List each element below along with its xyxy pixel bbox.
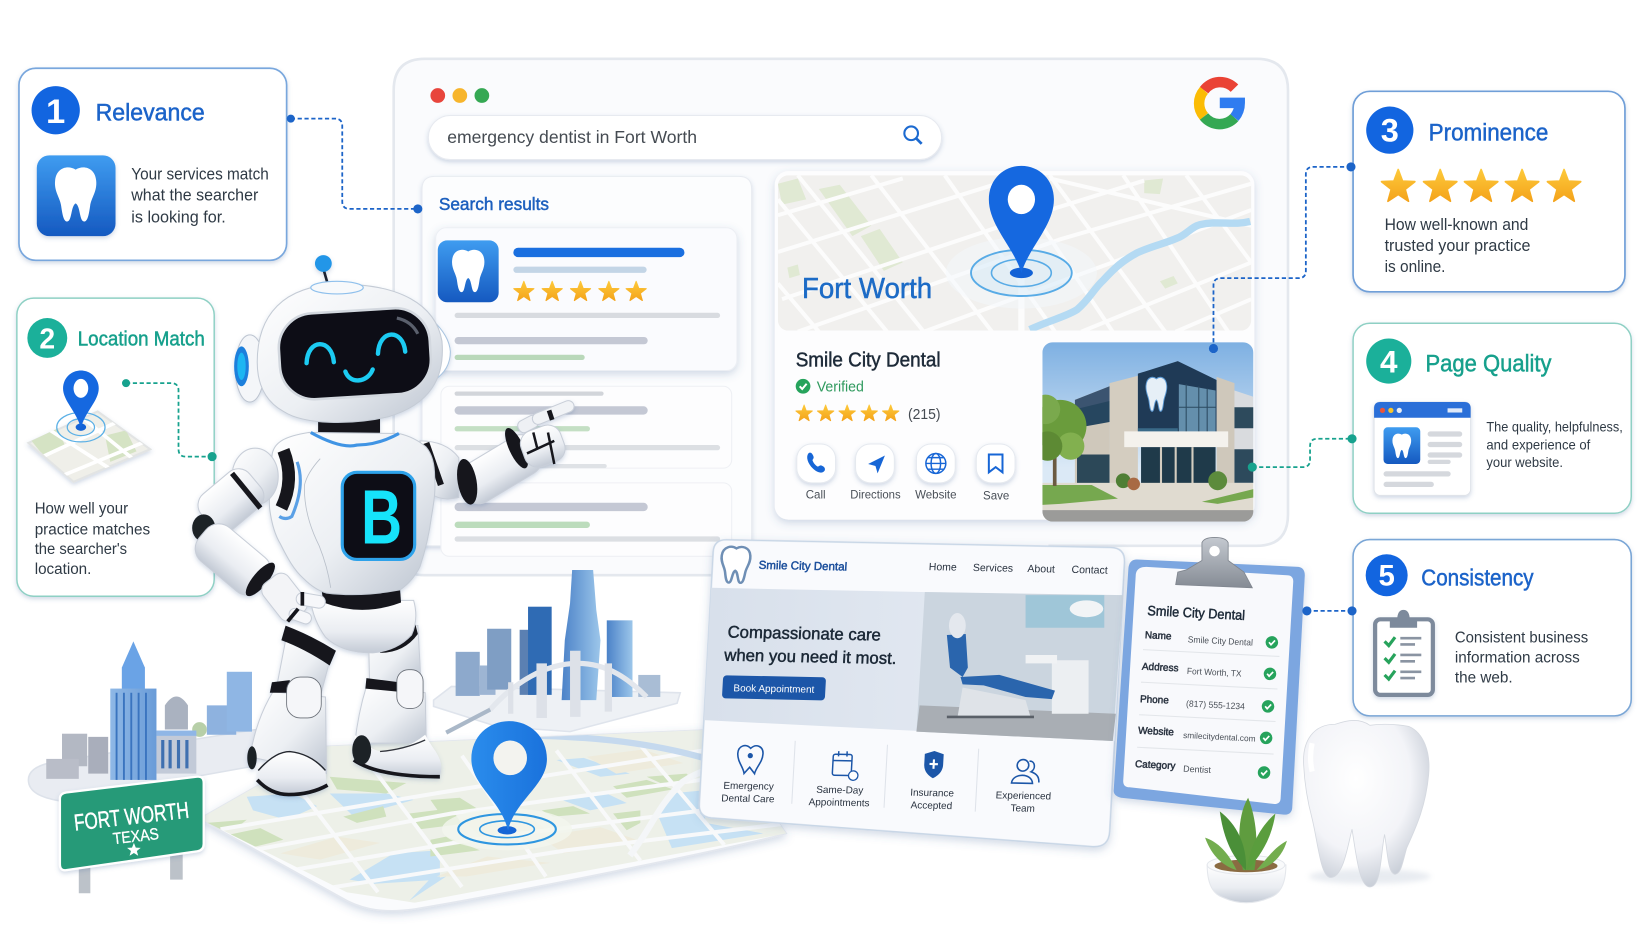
heading: Location Match [78, 328, 205, 350]
feature: emergency care: Dental Care [721, 793, 775, 805]
feature: same-day appointments: Appointments [808, 797, 870, 809]
site logo and name: Smile City Dental [758, 560, 847, 574]
description [35, 500, 150, 578]
number badge [1366, 107, 1413, 154]
star rating with count [796, 405, 941, 423]
row: category: Category [1135, 759, 1176, 772]
heading: Prominence [1429, 120, 1548, 147]
number badge [27, 318, 67, 358]
action: directions [850, 444, 901, 502]
icon: clipboard checklist [1375, 610, 1433, 695]
panel: search results [422, 176, 752, 556]
description: The quality, helpfulness, [1486, 419, 1623, 434]
callout 3: prominence [1353, 91, 1625, 292]
row: category: Dentist [1183, 764, 1212, 775]
number badge: 1 [46, 93, 65, 131]
site navigation: Home [928, 561, 957, 574]
feature: experienced team: Experienced [995, 790, 1051, 803]
feature: same-day appointments: Same-Day [816, 785, 864, 797]
map label: Fort Worth [802, 273, 932, 305]
icon: Google G [1199, 82, 1240, 124]
row: name [1144, 630, 1278, 649]
hero headline [723, 622, 898, 668]
description [130, 165, 269, 227]
clipboard frame [1114, 559, 1305, 815]
action: directions: Directions [850, 490, 901, 502]
row: address: Fort Worth, TX [1187, 666, 1242, 679]
row: phone: (817) 555-1234 [1186, 699, 1245, 711]
description: How well your [35, 500, 128, 517]
icon: tooth tile [438, 240, 499, 302]
row: website: smilecitydental.com [1183, 730, 1256, 744]
description: location. [35, 561, 91, 578]
photo: dental office building [1031, 342, 1253, 522]
number badge: 4 [1380, 345, 1398, 380]
feature: experienced team: Team [1010, 803, 1035, 815]
hero photo: dental chair [916, 592, 1123, 741]
site navigation: Contact [1071, 564, 1108, 577]
clipboard paper [1123, 567, 1293, 804]
feature: same-day appointments [808, 751, 872, 809]
map panel [778, 166, 1251, 332]
row: phone [1140, 694, 1275, 713]
illustration: potted plant [1205, 798, 1287, 903]
site navigation: About [1027, 563, 1055, 576]
robot legs [247, 621, 441, 795]
verified badge [796, 379, 864, 396]
callout 4: page quality [1353, 323, 1631, 513]
heading: search results: Search results [439, 194, 549, 214]
feature: emergency care: Emergency [723, 781, 774, 793]
robot pelvis [311, 600, 416, 653]
description: is online. [1385, 258, 1445, 276]
verified badge: Verified [817, 380, 864, 396]
row: website: Website [1138, 726, 1175, 738]
star rating with count: (215) [908, 407, 941, 423]
connector: consistency [1303, 607, 1356, 615]
description: is looking for. [131, 209, 226, 227]
heading: Consistency [1421, 565, 1534, 591]
star rating [514, 281, 646, 301]
illustration: Fort Worth sign: FORT WORTH [73, 797, 190, 836]
number badge: 5 [1378, 560, 1395, 593]
button: book appointment [722, 675, 826, 700]
row: address [1142, 661, 1277, 680]
icon: web page [1374, 402, 1471, 495]
connector: location match [123, 380, 216, 460]
description [1455, 629, 1588, 686]
action: save [976, 444, 1015, 503]
site navigation [928, 561, 1108, 577]
action: website: Website [915, 490, 957, 502]
five stars [1382, 170, 1581, 201]
action: save: Save [983, 491, 1009, 503]
site navigation: Services [973, 562, 1013, 575]
consistency checklist clipboard [1114, 537, 1305, 815]
feature: insurance: Insurance [910, 788, 955, 800]
feature: experienced team [995, 759, 1053, 815]
description: what the searcher [130, 186, 259, 204]
feature: insurance: Accepted [910, 800, 952, 812]
description: Consistent business [1455, 629, 1588, 646]
window controls [430, 88, 489, 103]
result card 1 [436, 228, 737, 371]
action: call [797, 444, 836, 502]
action: website [915, 444, 957, 502]
icon: tooth tile [37, 155, 116, 236]
illustration: Fort Worth sign: TEXAS [112, 825, 160, 848]
clipboard title: Smile City Dental [1147, 603, 1245, 623]
description: the searcher's [35, 541, 127, 558]
illustration: left skyline [28, 641, 256, 801]
row: name: Name [1145, 630, 1172, 642]
number badge [32, 86, 80, 134]
icon: magnifier [904, 126, 922, 144]
illustration: robot [188, 255, 576, 795]
action: call: Call [806, 490, 826, 502]
number badge [1366, 554, 1408, 596]
connector: prominence [1210, 163, 1355, 352]
browser window [394, 59, 1288, 575]
website content [708, 547, 1109, 816]
illustration: map platform [200, 730, 786, 911]
button: book appointment: Book Appointment [733, 683, 815, 696]
row: name: Smile City Dental [1188, 634, 1253, 648]
row: category [1135, 759, 1271, 779]
connector: page quality [1249, 435, 1356, 471]
description: information across [1455, 649, 1580, 666]
feature: emergency care [721, 745, 778, 805]
search bar: emergency dentist in Fort Worth [447, 127, 697, 147]
robot left arm [188, 448, 326, 626]
heading: Relevance [96, 100, 205, 127]
business name: Smile City Dental [796, 349, 941, 371]
row: address: Address [1142, 662, 1179, 674]
description: How well-known and [1385, 216, 1528, 234]
robot right arm [420, 399, 576, 510]
description: the web. [1455, 669, 1513, 686]
badge: letter B [342, 472, 415, 561]
description [1385, 216, 1530, 276]
robot neck [318, 418, 380, 441]
illustration: large map pin [442, 721, 572, 850]
row: website [1138, 725, 1273, 744]
description: Your services match [131, 165, 269, 183]
callout 1: relevance [19, 68, 287, 260]
illustration: right skyline [434, 570, 680, 733]
icon: map pin [971, 166, 1072, 296]
description: and experience of [1486, 437, 1591, 452]
result card 2 [441, 386, 732, 468]
description [1486, 419, 1623, 470]
illustration: large tooth [1304, 720, 1431, 887]
illustration: Fort Worth sign [60, 777, 204, 893]
feature: insurance [909, 751, 957, 812]
row: phone: Phone [1140, 694, 1170, 707]
callout 2: location match [17, 298, 214, 596]
connector: relevance to search results [288, 115, 422, 213]
icon: map with pin [28, 371, 150, 482]
badge: letter B: B [361, 476, 402, 561]
number badge: 2 [39, 323, 55, 355]
description: your website. [1486, 455, 1563, 470]
website mockup [697, 540, 1125, 847]
robot head [234, 255, 450, 422]
business listing card [775, 166, 1254, 522]
number badge: 3 [1381, 113, 1399, 149]
icon: metal clip [1176, 537, 1252, 588]
result card 3 [441, 483, 732, 556]
robot waist [321, 588, 401, 610]
description: practice matches [35, 521, 150, 538]
description: trusted your practice [1385, 237, 1530, 255]
hero headline: Compassionate care [727, 623, 881, 645]
callout 5: consistency [1353, 540, 1631, 716]
heading: Page Quality [1426, 351, 1552, 378]
search bar [428, 115, 942, 160]
number badge [1366, 339, 1411, 384]
website card [697, 540, 1125, 847]
site logo and name [720, 547, 848, 585]
hero headline: when you need it most. [723, 646, 897, 668]
robot torso [269, 432, 435, 595]
robot face [307, 335, 405, 380]
